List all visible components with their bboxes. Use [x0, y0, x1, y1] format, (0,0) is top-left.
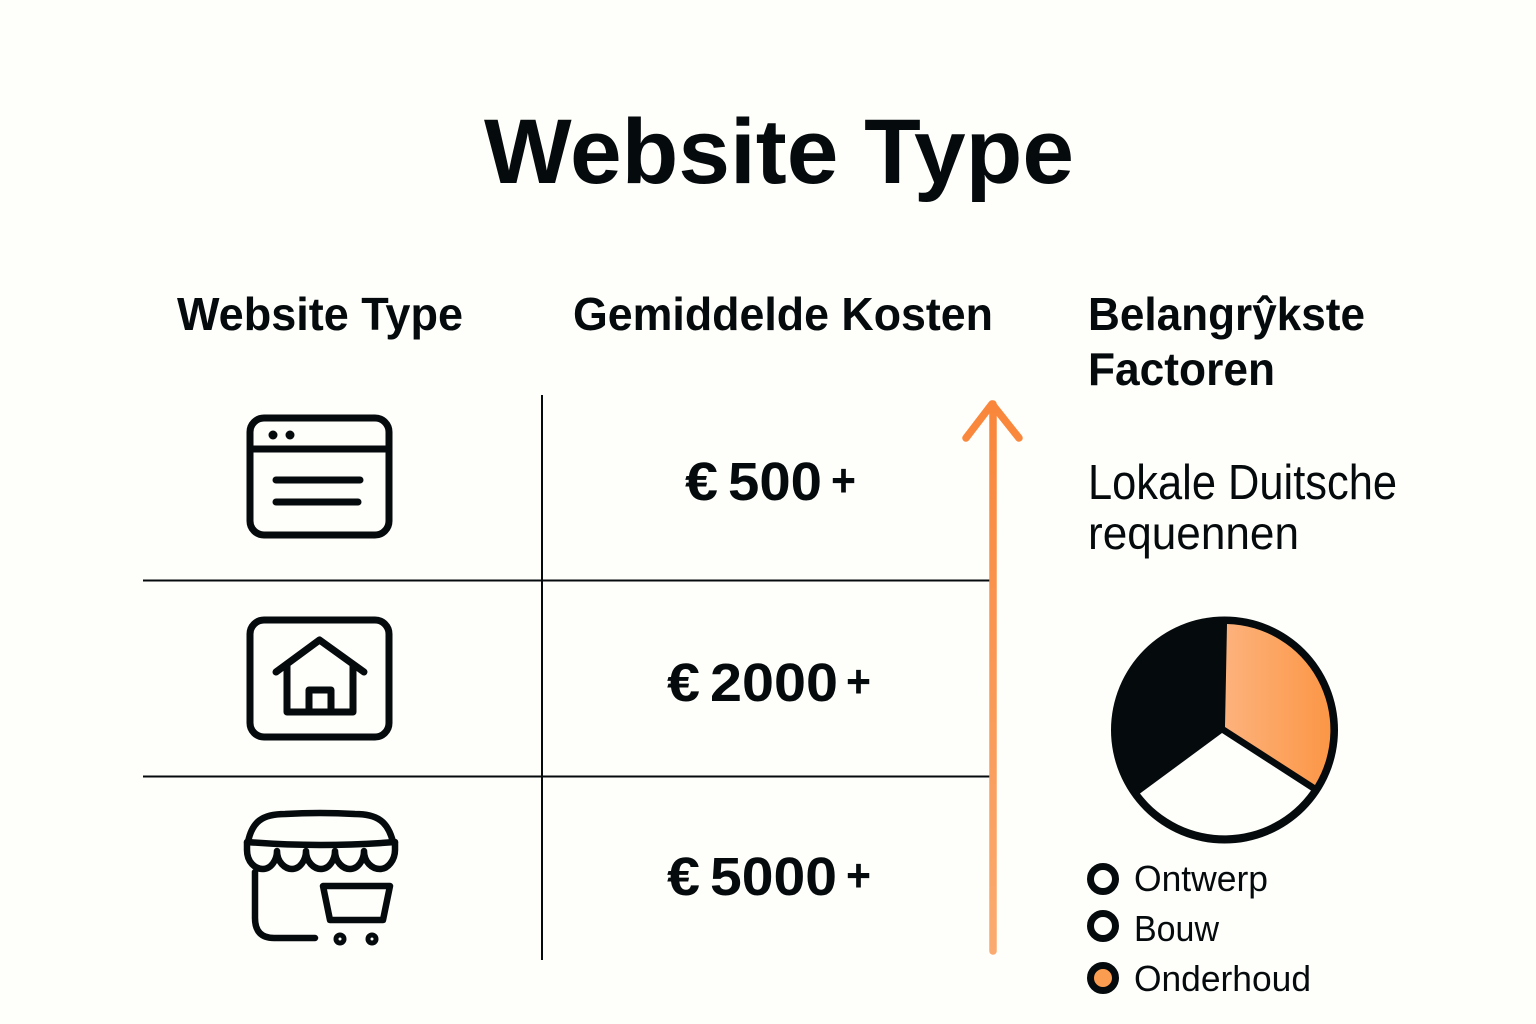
price: 2000: 2000: [710, 653, 838, 713]
text: local factors: Lokale Duitsche: [1088, 456, 1397, 510]
pie chart: [1111, 616, 1338, 844]
arrow: rising cost: [966, 404, 1019, 951]
legend item: Bouw: [1090, 908, 1220, 949]
pie slice: white: [1140, 733, 1311, 835]
legend item: Bouw: Bouw: [1134, 908, 1220, 949]
column heading: key factors: Belangrŷkste: [1088, 288, 1365, 340]
price: 500: +: [831, 454, 856, 506]
price: 2000: €: [667, 653, 700, 713]
text: local factors: [1088, 456, 1397, 559]
column heading: key factors: [1088, 288, 1365, 395]
column heading: key factors: Factoren: [1088, 343, 1275, 395]
price: 500: [685, 452, 856, 512]
legend item: Ontwerp: Ontwerp: [1134, 858, 1268, 899]
price: 5000: 5000: [710, 847, 837, 907]
pie slice: orange: [1225, 624, 1330, 785]
icon: browser window: [250, 418, 389, 535]
legend item: Onderhoud: Onderhoud: [1134, 958, 1311, 999]
price: 5000: +: [846, 849, 871, 901]
icon: shop with cart: [247, 813, 395, 943]
column heading: website type: Website Type: [177, 288, 463, 340]
price: 500: 500: [728, 452, 822, 512]
price: 5000: €: [667, 847, 700, 907]
price: 2000: [667, 653, 871, 713]
price: 2000: +: [846, 655, 871, 707]
text: local factors: requennen: [1088, 507, 1299, 559]
title: Website Type: [484, 101, 1074, 203]
price: 5000: [667, 847, 871, 907]
table grid lines: [143, 395, 990, 960]
legend: [1090, 858, 1311, 999]
price: 500: €: [685, 452, 718, 512]
column heading: average costs: Gemiddelde Kosten: [573, 288, 993, 340]
icon: house: [250, 620, 389, 737]
